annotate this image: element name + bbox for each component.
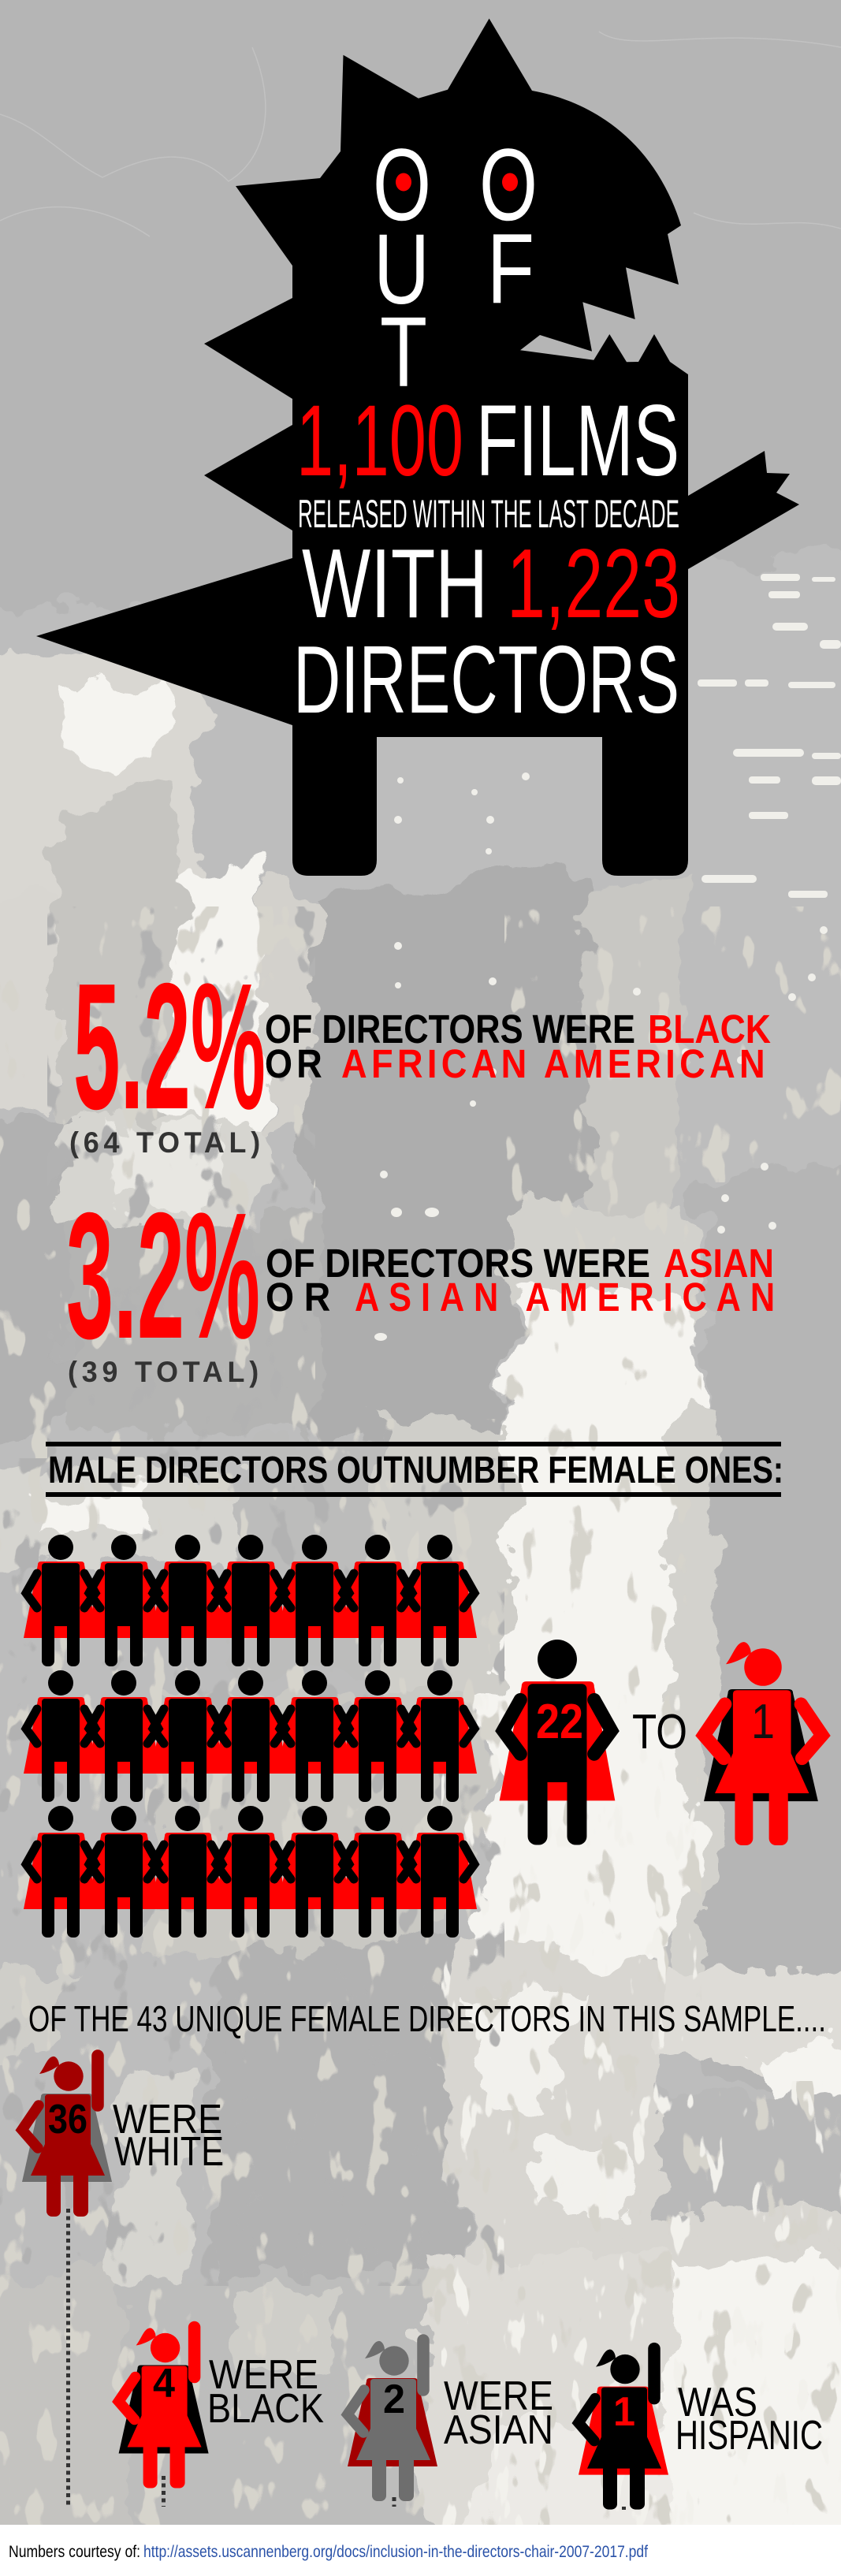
stat: 3.2 percent asian directors: OF DIRECTORS WERE xyxy=(266,1241,650,1286)
label: were black: BLACK xyxy=(207,2386,324,2432)
icon: red monster pupils xyxy=(396,173,518,191)
label: were asian: WERE xyxy=(444,2373,553,2419)
pictogram: 21 male directors xyxy=(24,1535,477,1938)
footer: source credit: http://assets.uscannenberg.org/docs/inclusion-in-the-directors-chair-2007-2017.pdf xyxy=(143,2543,648,2561)
monster silhouette xyxy=(36,19,799,876)
icon: 4 black female directors xyxy=(119,2327,209,2488)
label: were white: WERE xyxy=(113,2097,222,2142)
stat: 3.2 percent asian directors: (39 TOTAL) xyxy=(68,1356,263,1388)
icon: large male director, 22 xyxy=(500,1640,615,1845)
stat: 5.2 percent black directors: OR xyxy=(265,1041,326,1086)
label: were black: WERE xyxy=(209,2352,318,2398)
heading: 1,100 films: FILMS xyxy=(476,385,679,497)
label: was hispanic: WAS xyxy=(678,2380,757,2425)
stat: 5.2 percent black directors: (64 TOTAL) xyxy=(69,1126,265,1159)
icon: 36 white female directors xyxy=(22,2056,112,2217)
icon: 4 black female directors: 4 xyxy=(153,2361,175,2407)
title: out of: U xyxy=(374,214,430,325)
icon: 1 hispanic female director xyxy=(579,2349,668,2510)
heading: with 1,223: 1,223 xyxy=(507,530,680,638)
title: out of xyxy=(373,127,538,408)
label: were white xyxy=(113,2097,224,2175)
stat: 3.2 percent asian directors xyxy=(66,1176,784,1388)
icon: large female director, 1 xyxy=(704,1642,822,1845)
heading: with 1,223 xyxy=(302,530,680,638)
stat: 5.2 percent black directors: AFRICAN AMERICAN xyxy=(341,1041,769,1086)
icon: 1 hispanic female director: 1 xyxy=(613,2389,635,2435)
label: was hispanic xyxy=(675,2380,823,2459)
icon: large female director, 1: 1 xyxy=(751,1695,775,1749)
heading: 1,100 films: 1,100 xyxy=(296,385,463,497)
icon: 2 asian female directors: 2 xyxy=(383,2377,405,2422)
stat: 3.2 percent asian directors: 3.2% xyxy=(66,1176,260,1376)
text: to: TO xyxy=(632,1705,687,1759)
stat: 5.2 percent black directors: BLACK xyxy=(648,1007,771,1052)
stat: 5.2 percent black directors: 5.2% xyxy=(73,947,266,1147)
stat: 5.2 percent black directors xyxy=(69,947,771,1159)
title: out of: O xyxy=(479,127,538,242)
heading: with 1,223: WITH xyxy=(302,530,488,638)
label: were asian xyxy=(444,2373,553,2453)
footer: source credit xyxy=(0,2525,841,2576)
title: out of: T xyxy=(380,296,427,408)
label: were white: WHITE xyxy=(114,2129,224,2175)
heading: directors: DIRECTORS xyxy=(293,626,679,733)
heading: 1,100 films xyxy=(296,385,679,497)
label: were asian: ASIAN xyxy=(444,2407,553,2453)
title: out of: O xyxy=(373,127,431,242)
title: out of: F xyxy=(487,213,534,324)
icon: 2 asian female directors xyxy=(348,2340,437,2501)
footer: source credit: Numbers courtesy of: xyxy=(9,2543,140,2561)
label: were black xyxy=(207,2352,324,2432)
dotted connector lines xyxy=(68,2209,624,2510)
stat: 5.2 percent black directors: OF DIRECTORS WERE xyxy=(265,1007,635,1052)
icon: 36 white female directors: 36 xyxy=(48,2097,87,2142)
icon: large male director, 22: 22 xyxy=(536,1695,583,1749)
stat: 3.2 percent asian directors: ASIAN xyxy=(664,1241,774,1286)
stat: 3.2 percent asian directors: OR xyxy=(266,1275,340,1320)
